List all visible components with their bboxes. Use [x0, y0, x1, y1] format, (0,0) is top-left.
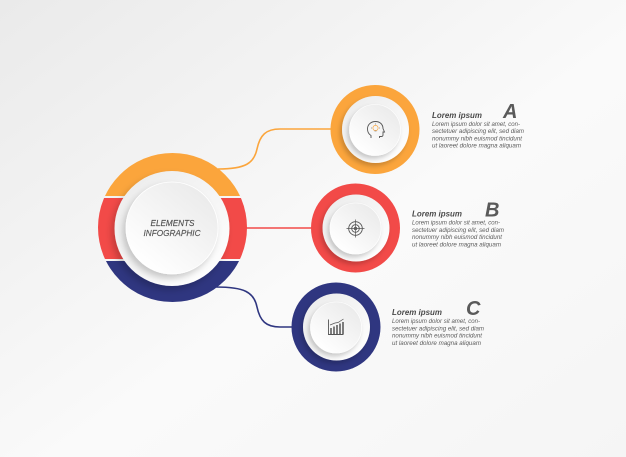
body B: sectetuer adipiscing elit, sed diam: [412, 227, 504, 234]
disc C: [310, 302, 362, 353]
letter C: C: [466, 298, 481, 320]
body A: [432, 121, 524, 150]
node C: navy circle: [292, 282, 380, 372]
heading A: Lorem ipsum: [432, 110, 482, 120]
main title: ELEMENTS: [150, 218, 195, 228]
body A: Lorem ipsum dolor sit amet, con-: [432, 121, 520, 128]
letter A: A: [502, 101, 517, 123]
letter B: B: [485, 200, 499, 222]
body B: ut laoreet dolore magna aliquam: [412, 241, 501, 248]
main outer plate: [114, 171, 230, 286]
heading C: Lorem ipsum: [392, 307, 442, 317]
connector: navy line to C: [216, 287, 296, 327]
body A: nonummy nibh euismod tincidunt: [432, 135, 522, 142]
body B: Lorem ipsum dolor sit amet, con-: [412, 220, 500, 227]
text block C: [392, 298, 484, 347]
connector: red line to B: [244, 227, 315, 229]
body C: [392, 318, 484, 347]
main ring: orange segment: [105, 153, 240, 196]
body C: sectetuer adipiscing elit, sed diam: [392, 325, 484, 332]
disc B: [330, 203, 381, 254]
body B: nonummy nibh euismod tincidunt: [412, 234, 502, 241]
text block A: [432, 101, 524, 150]
body C: ut laoreet dolore magna aliquam: [392, 340, 481, 347]
icon: target: [346, 220, 364, 238]
plate A: [342, 96, 409, 163]
body A: sectetuer adipiscing elit, sed diam: [432, 128, 524, 135]
main title: INFOGRAPHIC: [144, 228, 201, 238]
node B: red circle: [311, 184, 400, 272]
plate B: [322, 194, 390, 262]
body C: Lorem ipsum dolor sit amet, con-: [392, 318, 480, 325]
connector: orange line to A: [218, 129, 335, 169]
main ring: red segment: [98, 198, 247, 259]
ring C: [292, 282, 380, 372]
main title: [144, 218, 201, 238]
plate C: [303, 294, 370, 360]
disc A: [350, 104, 400, 156]
heading B: Lorem ipsum: [412, 208, 462, 218]
body C: nonummy nibh euismod tincidunt: [392, 333, 482, 340]
text block B: [412, 200, 504, 248]
main inner disc: [126, 182, 218, 274]
main ring: navy segment: [106, 261, 239, 302]
body B: [412, 220, 504, 248]
node A: orange circle: [330, 85, 420, 174]
body A: ut laoreet dolore magna aliquam: [432, 143, 521, 150]
ring A: [330, 85, 420, 174]
main circle: [98, 153, 247, 302]
icon: head with light bulb: [368, 122, 384, 138]
ring B: [311, 184, 400, 272]
icon: bar chart: [328, 319, 344, 334]
